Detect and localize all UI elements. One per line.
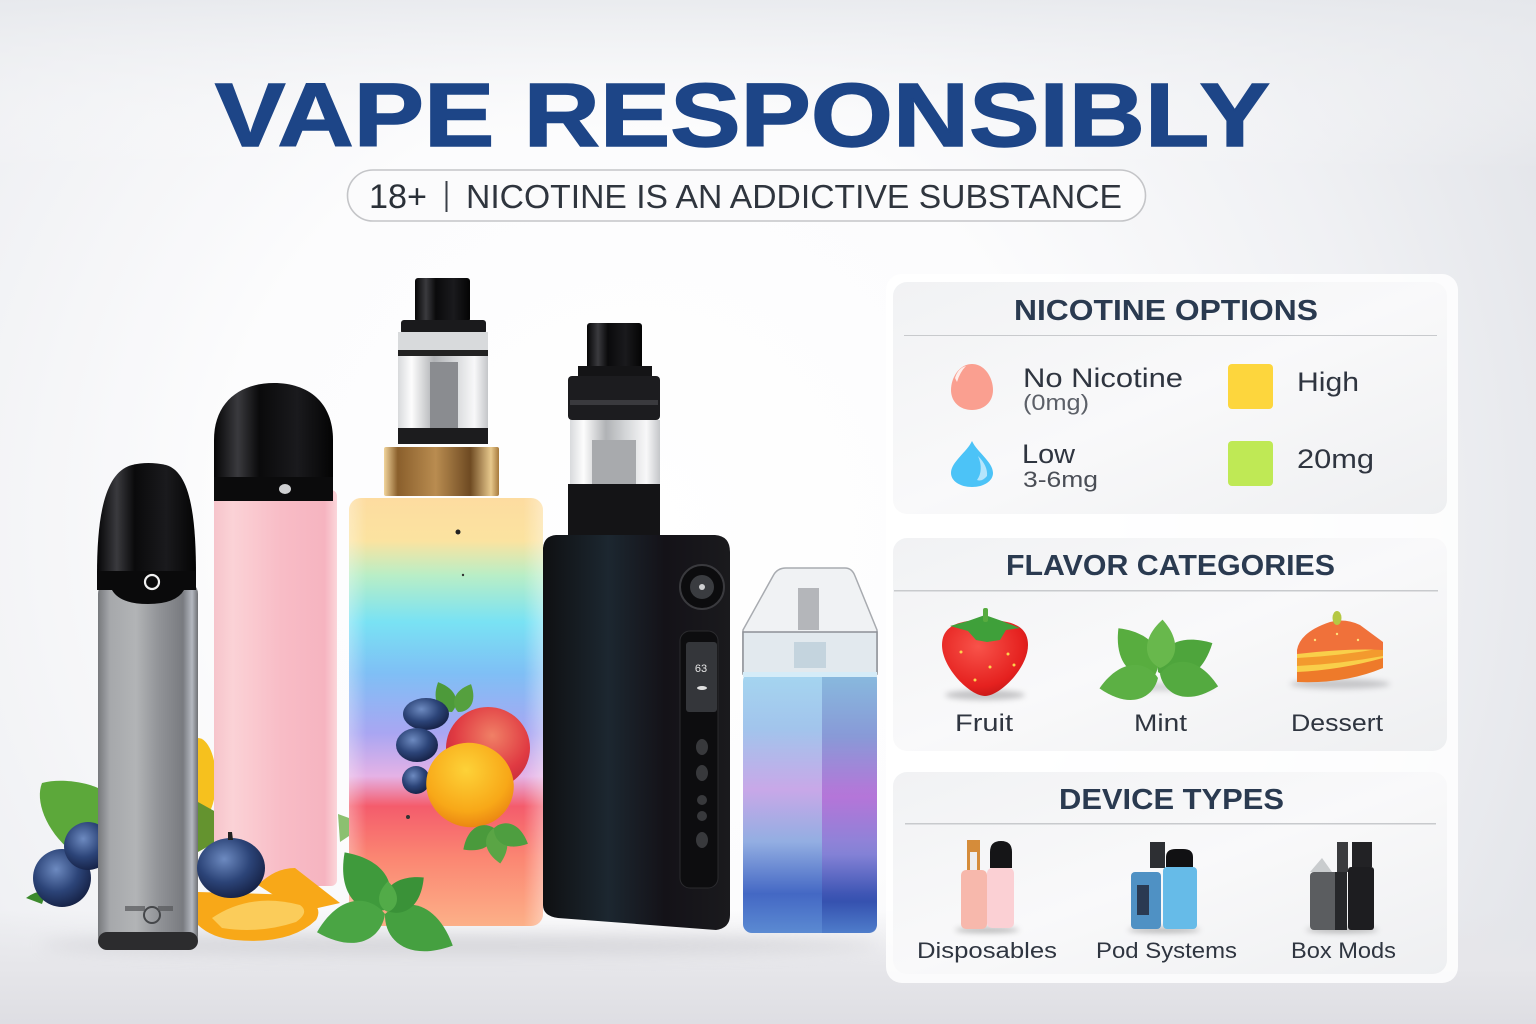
panel: device types [893, 772, 1447, 974]
flavor labels: Dessert [1291, 710, 1383, 737]
heading: device types: DEVICE TYPES [1059, 784, 1284, 816]
low label: Low [1022, 439, 1076, 469]
icon: pink drop [951, 364, 993, 410]
device: black box mod: 63 [695, 663, 707, 675]
no nicotine label: (0mg) [1023, 390, 1089, 415]
age and nicotine warning pill [348, 170, 1146, 221]
right column card [886, 274, 1458, 983]
icon: dessert cake [1290, 611, 1390, 689]
shadow under products [40, 935, 880, 955]
icon: strawberry [942, 608, 1028, 700]
high label: High [1297, 367, 1359, 397]
device labels: Pod Systems [1096, 938, 1237, 963]
no nicotine label [1023, 363, 1183, 415]
device labels: Box Mods [1291, 938, 1396, 963]
icon: pod systems [1128, 842, 1200, 933]
icon: disposables [955, 840, 1019, 933]
device labels: Disposables [917, 938, 1057, 963]
flavor labels: Mint [1134, 710, 1187, 737]
panel: nicotine options [893, 282, 1447, 514]
device: black box mod [543, 323, 730, 930]
device: silver pod [97, 463, 198, 950]
heading: flavor categories: FLAVOR CATEGORIES [1006, 550, 1335, 582]
icon: mint leaves [1096, 618, 1222, 705]
heading: nicotine options: NICOTINE OPTIONS [1014, 295, 1318, 327]
no nicotine label: No Nicotine [1023, 363, 1183, 393]
icon: green square [1228, 441, 1273, 486]
icon: yellow square [1228, 364, 1273, 409]
device: clear-top pod [743, 568, 877, 933]
age and nicotine warning pill: NICOTINE IS AN ADDICTIVE SUBSTANCE [466, 179, 1122, 216]
icon: blue drop [951, 441, 993, 487]
panel: flavor categories [893, 538, 1447, 751]
20mg label: 20mg [1297, 444, 1374, 474]
title: VAPE RESPONSIBLY [215, 66, 1270, 166]
device: rainbow tank mod [349, 278, 543, 926]
fruit behind devices: lemon and leaves [26, 738, 349, 907]
product group: vape devices and fruit [26, 278, 880, 965]
icon: box mods [1306, 842, 1378, 933]
age and nicotine warning pill: 18+ [369, 178, 427, 216]
fruit in front: blueberry, orange slices, mint [197, 832, 462, 965]
flavor labels [955, 710, 1383, 737]
low label [1022, 439, 1098, 492]
low label: 3-6mg [1023, 467, 1098, 492]
fruit printed on mod [396, 678, 533, 865]
flavor labels: Fruit [955, 710, 1013, 737]
device: pink pod [214, 383, 337, 886]
device labels [917, 938, 1396, 963]
